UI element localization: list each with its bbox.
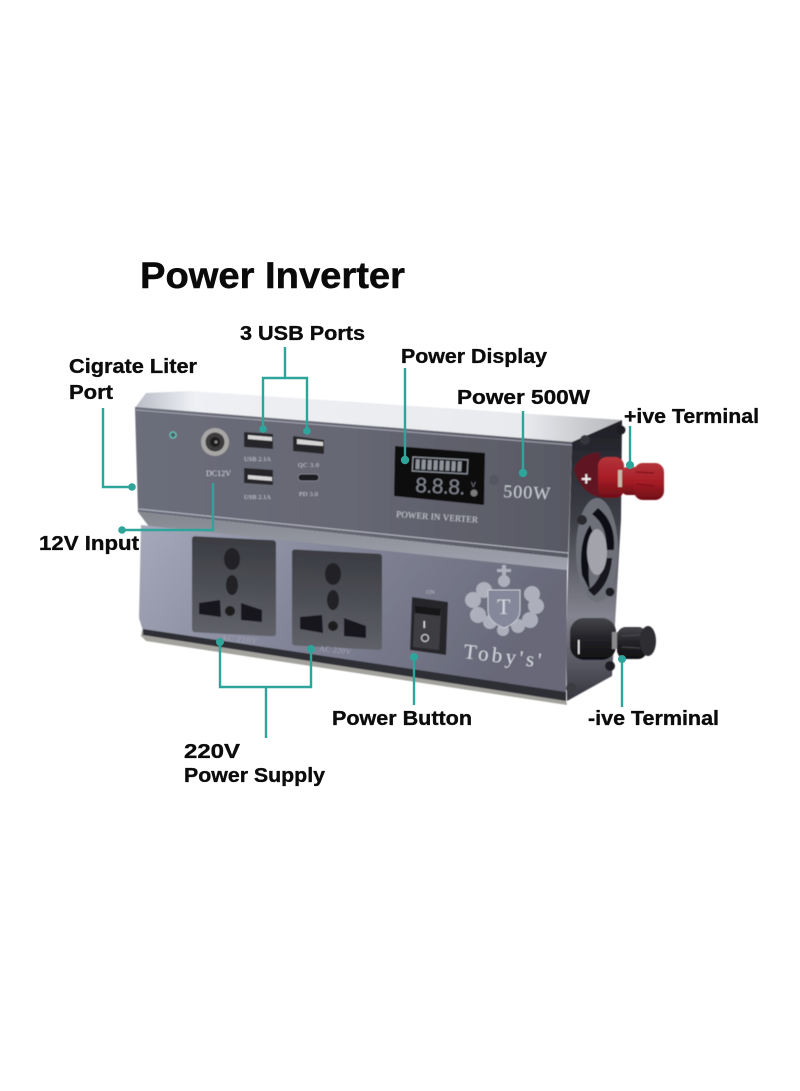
callout: negative terminal	[619, 656, 625, 707]
negative terminal	[570, 618, 656, 660]
socket labels: AC 220V	[221, 633, 258, 646]
DC12V input jack	[201, 428, 231, 478]
cooling fan	[576, 498, 618, 602]
rocker power switch: ON	[426, 590, 435, 596]
lower front panel	[139, 525, 567, 700]
Toby's crest logo: Toby's'	[462, 639, 543, 672]
Toby's crest logo	[462, 565, 544, 672]
callout: 220V power supply	[217, 639, 314, 738]
lower front bevel	[138, 512, 568, 573]
USB port 2	[244, 468, 273, 501]
DC12V input jack: DC12V	[206, 469, 231, 478]
callout: power button	[411, 654, 417, 705]
label: Cigrate Liter Port	[69, 356, 197, 404]
right side plate	[566, 420, 622, 701]
positive terminal	[574, 452, 664, 500]
callout lines and dots	[103, 347, 633, 738]
callout: cigarette lighter port	[103, 408, 135, 490]
positive terminal: +	[581, 469, 592, 489]
USB port 2: USB 2.1A	[244, 494, 271, 501]
USB QC port: QC 3.0	[298, 462, 319, 469]
USB-C port	[298, 474, 319, 498]
label: Power Display: Power Display	[401, 346, 548, 368]
callout: power display	[402, 368, 408, 463]
label: +ive Terminal: +ive Terminal	[624, 406, 759, 428]
label: 3 USB Ports: 3 USB Ports	[240, 323, 365, 345]
socket labels	[221, 633, 352, 656]
label: Cigrate Liter Port: Cigrate Liter	[69, 356, 197, 378]
top face	[135, 391, 622, 442]
callout: positive terminal	[627, 426, 633, 468]
power display	[394, 446, 485, 505]
power display: V	[471, 482, 476, 489]
USB QC port	[293, 436, 324, 469]
upper front panel	[135, 407, 572, 558]
callout: 12V input	[119, 483, 213, 533]
power inverter caption: POWER IN VERTER	[396, 509, 478, 525]
label: 12V Input: 12V Input	[39, 533, 139, 555]
socket labels: AC 220V	[319, 644, 352, 656]
callout: power 500W	[520, 411, 526, 476]
USB port 1: USB 2.1A	[244, 456, 271, 463]
USB-C port: PD 3.0	[299, 491, 318, 498]
label: Power Button: Power Button	[332, 708, 472, 730]
label: 220V Power Supply: 220V	[184, 741, 241, 763]
side plate screws	[566, 426, 626, 693]
USB port 1	[244, 432, 273, 463]
callout: 3 USB ports	[260, 347, 310, 434]
label: Cigrate Liter Port: Port	[69, 382, 113, 404]
rocker power switch	[410, 590, 448, 655]
bottom metal lip	[141, 630, 567, 705]
status LED	[170, 432, 176, 438]
power display: 8.8.8.	[415, 474, 466, 500]
label: 220V Power Supply	[184, 741, 326, 787]
500W mark: 500W	[503, 481, 551, 503]
title: Power Inverter	[140, 255, 405, 296]
socket 2	[292, 549, 382, 650]
power inverter photo	[135, 391, 664, 705]
label: -ive Terminal: -ive Terminal	[588, 708, 719, 730]
socket 1	[192, 536, 276, 636]
label: Power 500W: Power 500W	[457, 387, 590, 409]
Toby's crest logo: T	[497, 594, 511, 619]
label: 220V Power Supply: Power Supply	[184, 765, 326, 787]
